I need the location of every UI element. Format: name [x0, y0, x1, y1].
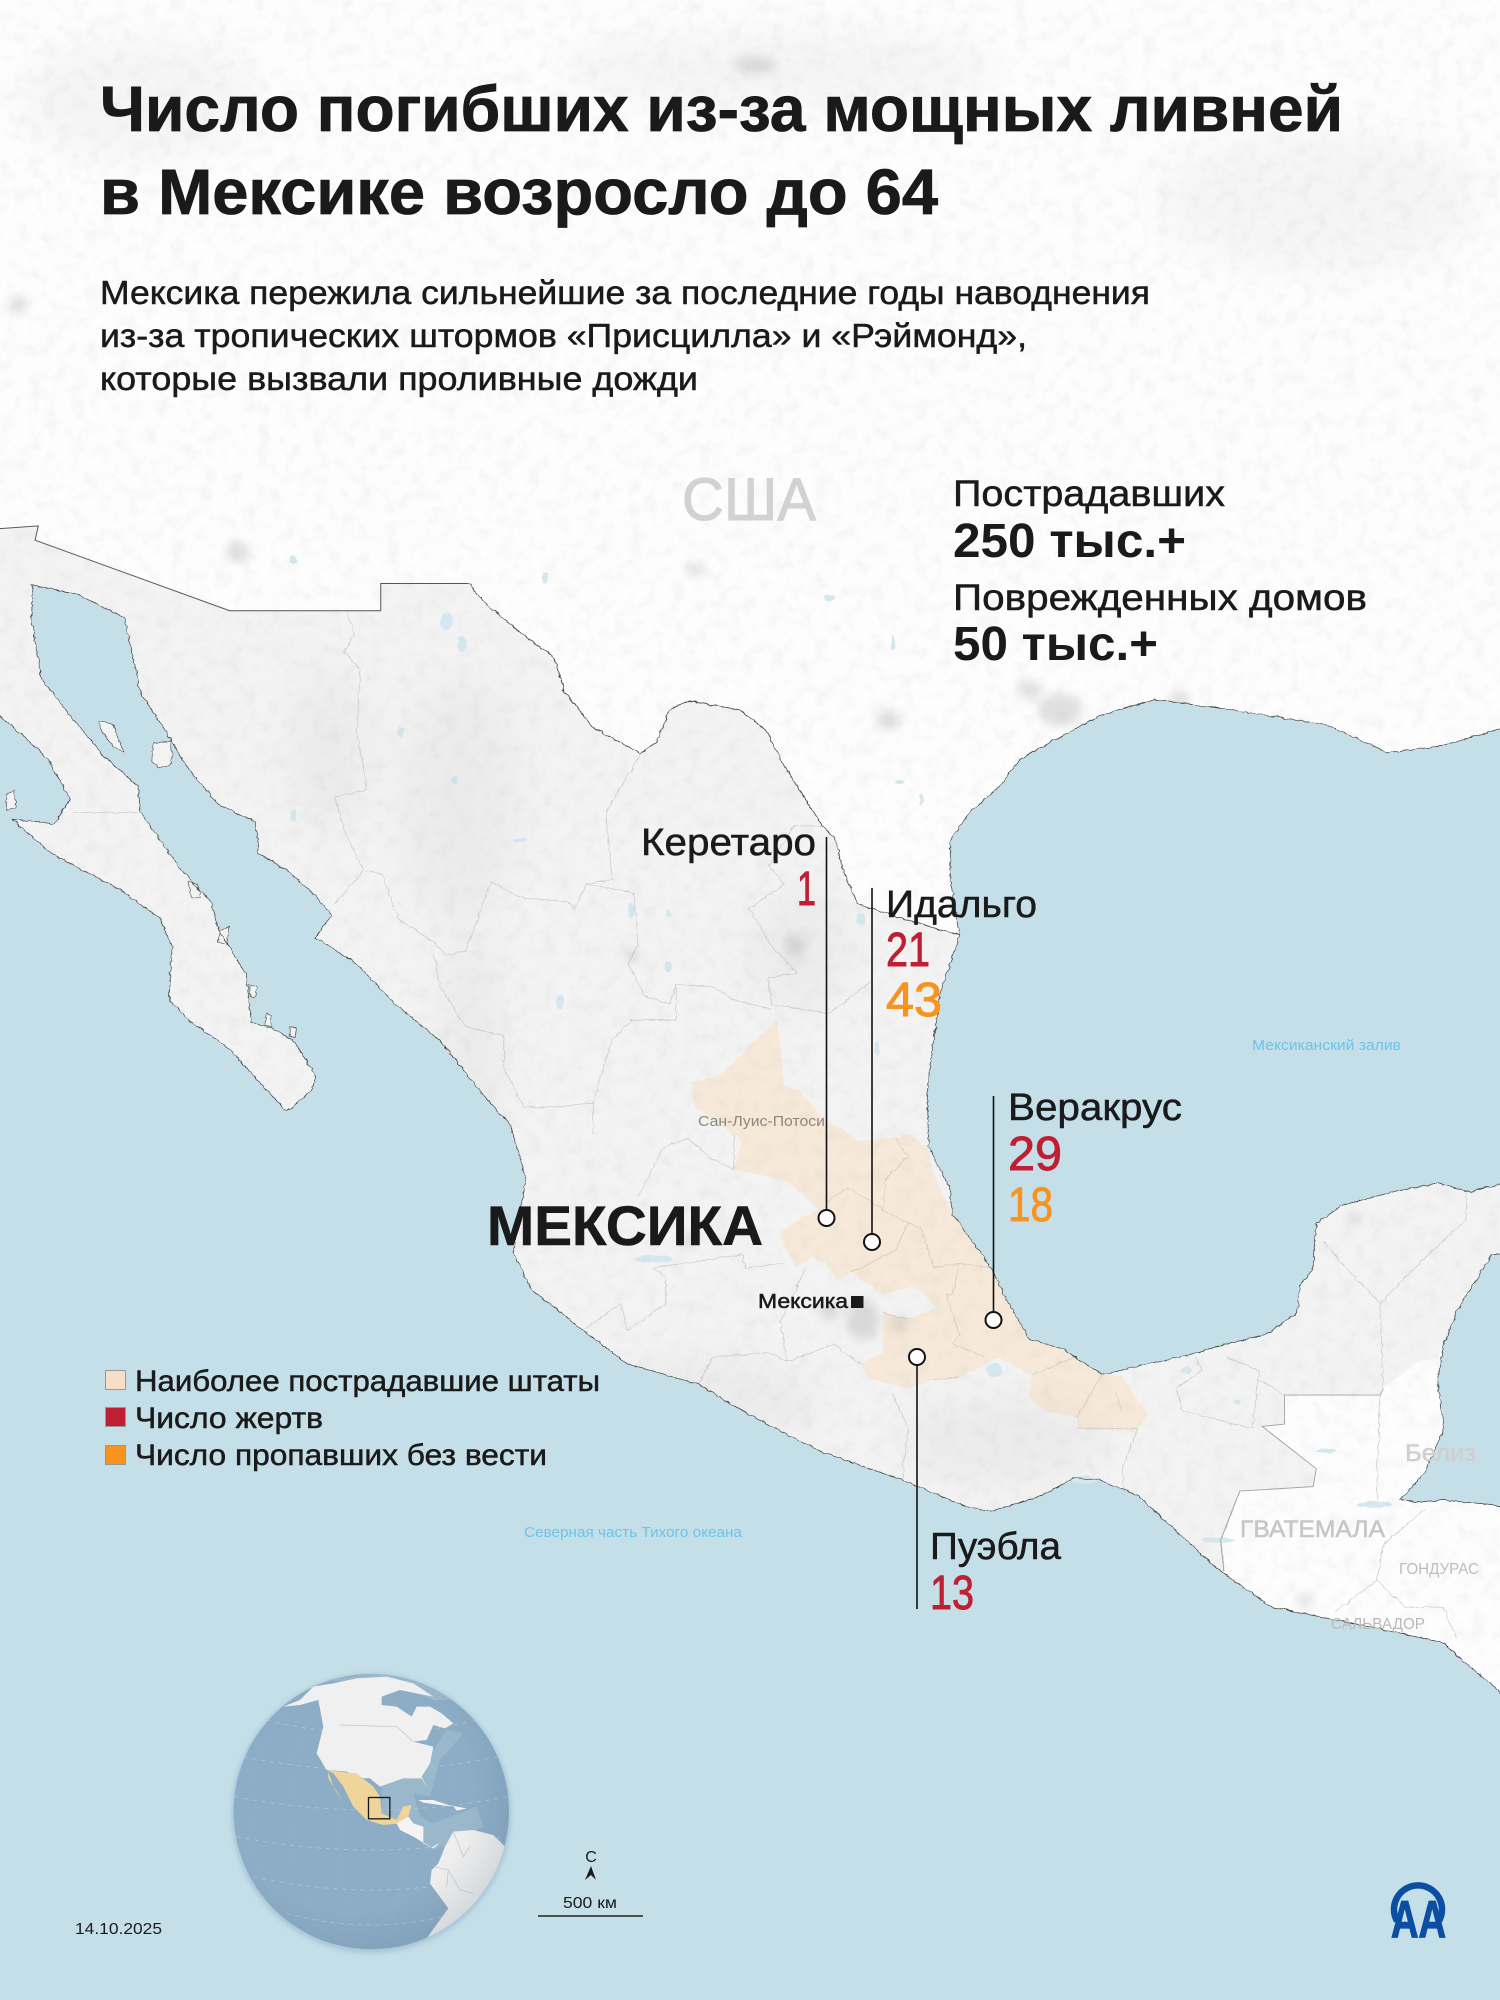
callout: Veracruz: 18: [1008, 1179, 1053, 1232]
small map labels: ГОНДУРАС: [1399, 1561, 1479, 1578]
callout: Hidalgo: 21: [886, 924, 930, 977]
lakes: [290, 556, 1392, 1543]
legend: Наиболее пострадавшие штаты: [135, 1365, 600, 1398]
globe borders: [340, 1725, 473, 1893]
state borders: [73, 612, 871, 1196]
sea label: Gulf of Mexico: Мексиканский залив: [1252, 1037, 1401, 1054]
stats block: Поврежденных домов: [953, 577, 1367, 618]
callout: Queretaro: Керетаро: [641, 822, 816, 864]
continental shelf: [327, 1670, 483, 1850]
land: Mexico: [0, 526, 1500, 1571]
small map labels: ГВАТЕМАЛА: [1240, 1516, 1385, 1543]
callout: Veracruz: 29: [1008, 1128, 1062, 1181]
title: [100, 73, 1343, 228]
title: в Мексике возросло до 64: [100, 156, 938, 228]
North America: [283, 1677, 453, 1790]
globe shading: [325, 1756, 509, 1949]
scale bar: [538, 1895, 643, 1916]
callout: Hidalgo: 43: [886, 974, 942, 1027]
small map labels: САЛЬВАДОР: [1331, 1616, 1425, 1633]
most affected states area: [691, 1020, 1147, 1432]
stats block: 250 тыс.+: [953, 515, 1186, 568]
logo: AA: [1391, 1885, 1446, 1949]
USA border line: [0, 526, 469, 611]
Guatemala and Belize borders: [1221, 1388, 1383, 1571]
locator globe: [231, 1670, 511, 1953]
country label: USA: США: [682, 466, 816, 533]
legend: [106, 1365, 600, 1472]
callout: Puebla: [909, 1349, 1062, 1620]
Mexico on globe: [327, 1770, 412, 1825]
title: Число погибших из-за мощных ливней: [100, 73, 1343, 145]
country label: Mexico: МЕКСИКА: [487, 1194, 763, 1257]
callout: Veracruz: Веракрус: [1008, 1087, 1182, 1129]
islands in the Gulf of California: [6, 721, 297, 1038]
small map labels: [698, 1113, 1479, 1633]
legend: Число жертв: [135, 1402, 323, 1435]
callout: Puebla: Пуэбла: [930, 1526, 1062, 1568]
land texture: [5, 2, 1496, 1611]
callout: Veracruz: [986, 1087, 1182, 1328]
callout: Hidalgo: [864, 884, 1037, 1250]
city and terrain shading: [9, 30, 1480, 1606]
sea label: North Pacific: Северная часть Тихого океана: [524, 1524, 743, 1541]
callout: Puebla: 13: [930, 1567, 974, 1620]
stats block: [953, 473, 1367, 671]
subtitle: которые вызвали проливные дожди: [100, 360, 698, 397]
South America on globe: [427, 1830, 505, 1938]
graticule: [235, 1674, 508, 1949]
north arrow: [585, 1849, 597, 1880]
stats block: 50 тыс.+: [953, 618, 1158, 671]
Central America on globe: [397, 1817, 440, 1848]
small map labels: Белиз: [1405, 1440, 1476, 1467]
date: 14.10.2025: [75, 1921, 162, 1938]
capital label: Mexico City: Мексика: [758, 1291, 849, 1313]
callout: Queretaro: [641, 822, 834, 1226]
locator frame: [368, 1797, 390, 1819]
subtitle: из-за тропических штормов «Присцилла» и «Рэймонд»,: [100, 317, 1027, 354]
small map labels: Сан-Луис-Потоси: [698, 1113, 825, 1130]
callout: Hidalgo: Идальго: [886, 884, 1037, 926]
Rio Grande border: [469, 583, 960, 935]
stats block: Пострадавших: [953, 473, 1226, 514]
scale bar: 500 км: [563, 1895, 617, 1912]
north arrow: С: [585, 1849, 597, 1866]
subtitle: Мексика пережила сильнейшие за последние годы наводнения: [100, 274, 1150, 311]
legend: Число пропавших без вести: [135, 1439, 547, 1472]
subtitle: [100, 274, 1150, 397]
Caribbean islands: [418, 1800, 467, 1811]
logo: AA: AA: [1391, 1891, 1446, 1949]
callout: Queretaro: 1: [797, 863, 816, 916]
